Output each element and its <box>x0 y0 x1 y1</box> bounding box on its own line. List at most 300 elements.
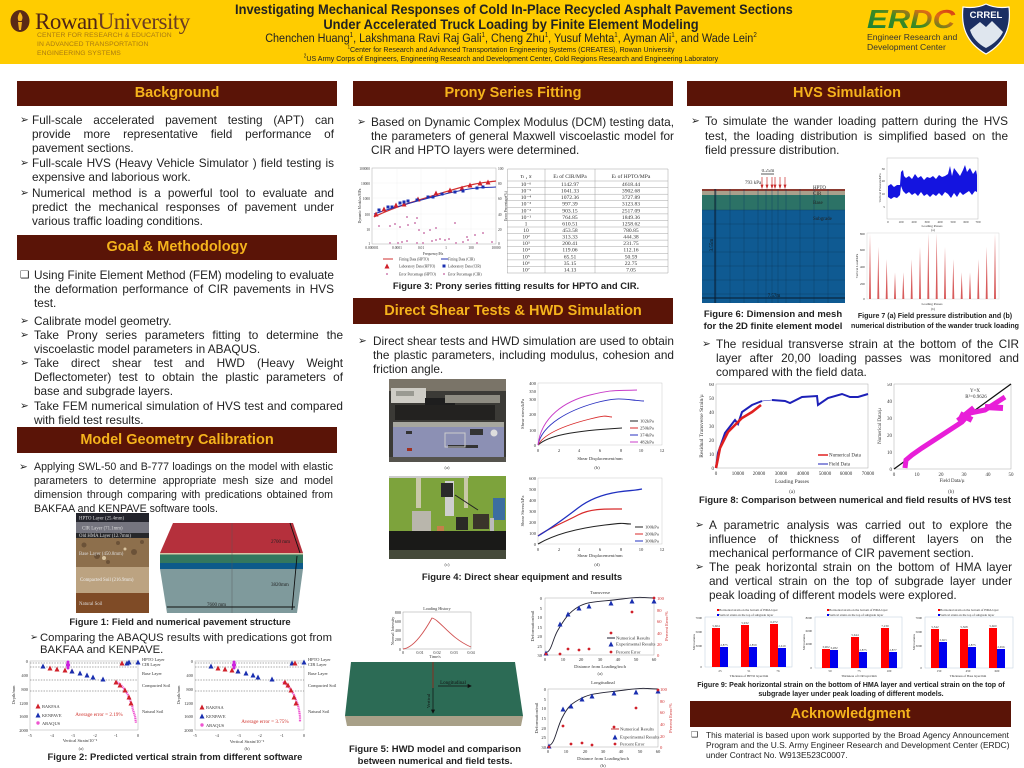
chart: transverse: Percent Error/% <box>664 611 669 641</box>
figure 3: prony parameter table: 453.58 <box>562 228 578 234</box>
bullet: loadings: parameters to determine appropriate mesh size and model <box>34 475 333 487</box>
bullet: APT: provide more representative field performance of <box>32 127 334 141</box>
bar chart: HPTO thickness: 76 <box>776 669 780 673</box>
bar chart: base thickness <box>912 608 1013 678</box>
figure 3: dynamic modulus chart: 100 <box>468 246 474 250</box>
logo: CRREL shield <box>962 3 1010 55</box>
figure 6: 2D finite element mesh: CIR <box>813 192 822 197</box>
chart b: numerical pressure: 800 <box>860 232 865 236</box>
figure 3: prony parameter table: 3727.89 <box>622 195 640 201</box>
figure 1: numerical 3D model: 2700 mm <box>271 540 290 545</box>
bar chart: CIR thickness: 6000 <box>806 629 812 633</box>
chart: transverse: 40 <box>657 631 662 636</box>
bar chart: HPTO thickness: 2,859 <box>749 643 757 648</box>
heading: direct shear tests and HWD simulation: Direct Shear Tests & HWD Simulation <box>384 303 642 319</box>
figure 6: 2D finite element mesh: 793 kPa <box>745 181 762 186</box>
affiliations: 1Center for Research and Advanced Transportation Engineering Systems (CREATES), Rowan University <box>347 44 675 54</box>
bullet: peak strain: and vertical strain on the top of subgrade layer under <box>709 574 1012 588</box>
chart b: shear stress at four pressures: 300 <box>529 397 537 402</box>
photo a: shear machine: (a) <box>444 465 450 470</box>
chart b: numerical versus field scatter <box>878 383 1014 495</box>
bullet: residual strain: layer after 20,00 loading passes was monitored and <box>716 351 1019 365</box>
chart: longitudinal: Percent Error <box>620 742 645 746</box>
chart a: residual transverse strain: Residual Transverse Strain/μ <box>699 394 705 458</box>
chart d: shear stress at three pressures: Shear Displacement/mm <box>577 553 623 558</box>
chart: transverse: (a) <box>597 671 603 676</box>
chart: longitudinal: Numerical Results <box>620 726 654 732</box>
heading: model geometry calibration <box>17 427 337 453</box>
bar chart: HPTO thickness: 51 <box>747 669 751 673</box>
figure 2b: vertical strain chart: (b) <box>244 746 250 751</box>
figure 2a: vertical strain chart: Average error = 2.19% <box>75 712 123 718</box>
chart: transverse: 10 <box>561 657 566 662</box>
figure 2b: vertical strain chart: -1 <box>280 733 284 738</box>
chart a: field pressure: 500 <box>950 220 956 224</box>
figure 2a: vertical strain chart: HPTO Layer <box>142 657 165 662</box>
bullet: FEM simulation: ➢ <box>20 400 29 412</box>
chart a: field pressure: Loading Passes <box>921 224 943 228</box>
caption: figure 5: Figure 5: HWD model and comparison <box>349 744 521 755</box>
bullet: FEM objective: ❑ <box>20 269 29 281</box>
heading: background <box>17 81 337 106</box>
chart: longitudinal: 0 <box>544 687 547 692</box>
chart: transverse: 5 <box>540 606 543 611</box>
chart a: residual transverse strain: 50 <box>709 397 714 402</box>
chart: longitudinal: 10 <box>541 706 547 711</box>
panel: HVS simulation <box>687 81 1019 698</box>
chart: transverse: Percent Error <box>616 650 641 654</box>
bullet: DCM: CIR and HPTO layers were determined. <box>371 143 579 157</box>
chart: longitudinal: (b) <box>600 763 606 768</box>
bullet: calibrate: ➢ <box>20 315 29 327</box>
figure 5: comparison charts <box>530 590 673 768</box>
chart b: numerical pressure: 600 <box>860 248 865 252</box>
bullet: FEM simulation <box>20 399 343 427</box>
chart b: numerical versus field scatter: R²=0.9626 <box>965 394 987 400</box>
caption: figure 6 <box>693 309 853 332</box>
bullet: residual strain: compared with the field data. <box>716 365 867 379</box>
bullet: HVS: Full-scale HVS (Heavy Vehicle Simulator ) field testing is <box>32 156 334 170</box>
bullet: wander loading: ➢ <box>691 115 700 127</box>
chart: transverse: 20 <box>579 657 584 662</box>
figure 2b: vertical strain chart: Vertical Strain/10⁻³ <box>230 739 265 744</box>
bar chart: CIR thickness: 0 <box>810 666 812 670</box>
chart b: numerical pressure: 0 <box>863 297 865 301</box>
caption: figure 9 <box>691 681 1011 699</box>
chart: transverse: 25 <box>537 644 543 649</box>
chart: longitudinal: 40 <box>660 722 665 727</box>
figure 1: numerical 3D model: 3820mm <box>271 583 289 588</box>
bullet: direct shear: friction angle. <box>373 362 443 376</box>
affiliations: 2US Army Corps of Engineers, Engineering Research and Development Center, Cold Regions Research and Engineering Laboratory <box>304 53 718 63</box>
bar chart: HPTO thickness <box>692 608 792 678</box>
figure 2b: vertical strain chart: -4 <box>215 733 220 738</box>
title: Investigating Mechanical Responses of Cold In-Place Recycled Asphalt Pavement Sections <box>235 1 793 17</box>
figure 2a: vertical strain chart: 2000 <box>19 728 29 733</box>
chart d: shear stress at three pressures: 500 <box>529 487 537 492</box>
chart: longitudinal: 30 <box>541 745 547 750</box>
chart d: shear stress at three pressures: Shear Stress/kPa <box>520 496 525 526</box>
panel: background <box>17 81 337 228</box>
figure 3: prony parameter table: 14.13 <box>564 267 576 273</box>
logo: ERDC: ERDC <box>867 4 956 34</box>
chart b: numerical versus field scatter: 10 <box>887 451 892 456</box>
figure 3: dynamic modulus chart: 0 <box>498 242 500 246</box>
figure 3: prony parameter table: 22.75 <box>625 261 637 267</box>
figure 1: field pavement layers photo: CIR Layer (71.1mm) <box>82 526 123 532</box>
bar chart: HPTO thickness: 5000 <box>696 630 702 634</box>
bar chart: base thickness: 0 <box>920 666 922 670</box>
figure 2b: vertical strain chart: 1200 <box>184 701 194 706</box>
figure 2b: vertical strain chart: -2 <box>258 733 262 738</box>
chart d: shear stress at three pressures: 12 <box>660 547 665 552</box>
figure 3: dynamic modulus chart: 10000 <box>361 182 370 186</box>
figure 2b: vertical strain chart: Natural Soil <box>308 709 330 714</box>
bullet: HVS: expensive and laborious work. <box>32 170 191 184</box>
figure 3: dynamic modulus chart: 100 <box>365 213 370 217</box>
chart: transverse: 80 <box>657 608 662 613</box>
heading: background: Background <box>135 85 219 101</box>
chart b: shear stress at four pressures: 250kPa <box>640 426 654 431</box>
bullet: parametric analysis: A parametric analysis was carried out to explore the <box>709 518 1012 532</box>
chart d: shear stress at three pressures: 4 <box>578 547 581 552</box>
figure 3: prony parameter table: 10⁻³ <box>521 202 531 208</box>
bullet: direct shear: ➢ <box>20 357 29 369</box>
chart b: shear stress at four pressures: 4 <box>578 448 581 453</box>
chart: transverse: 0 <box>544 657 547 662</box>
figure 3: dynamic modulus chart: 0.01 <box>418 246 424 250</box>
bullet: FEM objective: Using Finite Element Method (FEM) modeling to evaluate <box>34 268 334 282</box>
chart b: numerical versus field scatter: 20 <box>887 434 892 439</box>
authors: Chenchen Huang1, Lakshmana Ravi Raj Gali1, Cheng Zhu1, Yusuf Mehta1, Ayman Ali1, and Wade Lein2 <box>265 31 757 45</box>
figure 6: 2D finite element mesh: Subgrade <box>813 217 833 222</box>
figure 1: numerical 3D model <box>160 522 303 613</box>
chart a: residual transverse strain: 20000 <box>753 472 766 477</box>
bar chart: HPTO thickness: 0 <box>700 665 702 669</box>
chart: transverse: Distance from Loading/inch <box>574 664 627 669</box>
figure 3: prony parameter table: 10⁻⁶ <box>521 182 531 188</box>
bullet: DCM: ➢ <box>357 116 366 128</box>
figure 2a: vertical strain chart: Vertical Strain/10⁻³ <box>63 738 98 743</box>
figure 3: dynamic modulus chart: Error Percentage (HPTO) <box>399 272 437 276</box>
bar chart: base thickness: 7000 <box>916 616 922 620</box>
chart a: residual transverse strain <box>699 383 875 495</box>
bar chart: base thickness: 600 <box>995 669 1000 673</box>
figure 6: 2D finite element mesh: HPTO <box>813 186 826 191</box>
bullet: direct shear: Deflectometer) test to obtain the plastic parameters of <box>34 370 343 384</box>
bar chart: base thickness: 5,660 <box>989 624 997 629</box>
chart a: residual transverse strain: 50000 <box>819 472 832 477</box>
figure 3: prony parameter table: 10⁻⁴ <box>521 195 531 201</box>
bullet: residual strain: The residual transverse strain at the bottom of the CIR <box>716 337 1019 351</box>
chart a: residual transverse strain: 0 <box>712 467 714 472</box>
chart b: shear stress at four pressures: 6 <box>599 448 602 453</box>
chart d: shear stress at three pressures: (d) <box>594 562 600 567</box>
bar chart: HPTO thickness: 2,875 <box>720 643 728 648</box>
figure 2a: vertical strain chart: 400 <box>21 673 29 678</box>
chart b: numerical pressure: (b) <box>931 307 935 311</box>
caption: figure 8: Figure 8: Comparison between numerical and field results of HVS test <box>699 494 1011 505</box>
chart: transverse: Transverse <box>590 590 610 595</box>
figure 9: bar charts <box>690 605 1015 685</box>
figure 3: prony parameter table: 2517.09 <box>622 208 640 214</box>
chart: transverse: Experimental Results <box>616 642 656 646</box>
chart b: numerical versus field scatter: (b) <box>948 490 954 495</box>
chart a: field pressure <box>878 158 981 232</box>
chart b: numerical versus field scatter: 20 <box>938 473 944 478</box>
figure 3: prony parameter table: 231.75 <box>623 241 639 247</box>
chart a: residual transverse strain: 0 <box>715 472 718 477</box>
chart a: field pressure: Vertical Pressure/kPa <box>878 173 882 202</box>
heading: direct shear tests and HWD simulation <box>353 298 673 324</box>
figure 2b: vertical strain chart: 2000 <box>184 728 194 733</box>
bullet: peak strain: peak loading of different models were explored. <box>709 588 957 602</box>
figure 2b: vertical strain chart: 0 <box>191 659 194 664</box>
chart a: field pressure: 700 <box>975 220 981 224</box>
panel: goal and methodology <box>17 235 344 427</box>
bullet: parametric analysis: mechanical performance of CIR pavement section. <box>709 546 974 560</box>
chart: longitudinal <box>534 680 673 768</box>
bar chart: HPTO thickness: 3000 <box>696 644 702 648</box>
logo sub-caption: CENTER FOR RESEARCH & EDUCATION <box>37 32 172 39</box>
heading: HVS simulation <box>687 81 1007 106</box>
figure 2b: vertical strain chart: BAKFAA <box>206 705 225 710</box>
chart d: shear stress at three pressures: 200 <box>529 520 537 525</box>
bullet: FEM objective: test. <box>34 296 56 310</box>
chart: longitudinal: 20 <box>583 749 588 754</box>
text: acknowledgment <box>691 730 1009 760</box>
chart: longitudinal: 40 <box>619 749 624 754</box>
chart b: numerical pressure: 400 <box>860 265 865 269</box>
figure 3: dynamic modulus chart: 0.0001 <box>392 246 402 250</box>
figure 3: dynamic modulus chart: 10000 <box>492 246 501 250</box>
bar chart: CIR thickness: Horizontal strain on the bottom of HMA layer <box>829 608 889 612</box>
figure 2b: vertical strain chart: KENPAVE <box>206 714 226 719</box>
bar chart: HPTO thickness: Thickness of HPTO layer/mm <box>730 674 769 678</box>
figure 5: HWD model: 0.02 <box>433 650 441 655</box>
title <box>235 1 793 32</box>
chart d: shear stress at three pressures: 10 <box>639 547 644 552</box>
chart a: residual transverse strain: Numerical Data <box>829 454 862 458</box>
text: acknowledgment: This material is based upon work supported by the Broad Agency Announcement <box>706 730 1009 740</box>
figure 2a: vertical strain chart: Natural Soil <box>142 709 164 714</box>
figure 3: prony parameter table: 610.51 <box>562 221 578 227</box>
chart a: field pressure: 5 <box>883 205 885 209</box>
figure 3: prony parameter table: 1849.36 <box>622 215 640 221</box>
figure 3: dynamic modulus chart: 80 <box>498 182 502 186</box>
chart b: shear stress at four pressures: 102kPa <box>640 419 654 424</box>
caption: figure 6: Figure 6: Dimension and mesh <box>704 309 842 320</box>
figure 3: prony parameter table: 65.51 <box>564 254 576 260</box>
bullet: APT: pavement sections. <box>32 141 134 155</box>
figure 5: HWD model: 0.03 <box>450 650 458 655</box>
bullet: direct shear: base and subgrade layers. <box>34 384 173 398</box>
bar chart: CIR thickness: 5,644 <box>851 633 859 638</box>
chart: longitudinal: 5 <box>544 697 547 702</box>
figure 3: prony parameter table: 10⁻² <box>521 208 531 214</box>
figure 1: field pavement layers photo: Natural Soil <box>79 602 103 607</box>
figure 3: prony parameter table: 10 <box>523 228 529 234</box>
bullet: numerical method: ➢ <box>20 187 29 199</box>
chart b: shear stress at four pressures: 8 <box>620 448 623 453</box>
chart a: field pressure: 10 <box>882 192 885 196</box>
figure 2a: vertical strain chart: ABAQUS <box>42 721 61 726</box>
chart a: field pressure: 100 <box>898 220 904 224</box>
chart a: residual transverse strain: Field Data <box>829 462 851 468</box>
logo: CRREL shield: CRREL <box>970 10 1003 21</box>
caption: figure 7: Figure 7 (a) Field pressure distribution and (b) <box>858 313 1012 320</box>
bullet: numerical method <box>20 186 334 228</box>
figure 2a: vertical strain chart: 1200 <box>19 701 29 706</box>
figure 3: prony parameter table: 10⁻⁵ <box>521 189 531 195</box>
bar chart: base thickness: Horizontal strain on the bottom of HMA layer <box>940 608 1000 612</box>
chart b: shear stress at four pressures: (b) <box>594 465 600 470</box>
figure 3: prony parameter table: 4618.44 <box>622 182 640 188</box>
figure 2a: vertical strain chart: -2 <box>93 733 97 738</box>
figure 3: prony parameter table: 1142.97 <box>561 182 579 188</box>
chart d: shear stress at three pressures: 400 <box>529 498 537 503</box>
bar chart: CIR thickness: 75 <box>857 669 861 673</box>
chart: longitudinal: 0 <box>660 745 663 750</box>
chart d: shear stress at three pressures: 8 <box>620 547 623 552</box>
chart: transverse: Numerical Results <box>616 636 650 640</box>
bullet: numerical method: Numerical method is a powerful tool to evaluate and <box>32 186 334 200</box>
logo sub-caption: IN ADVANCED TRANSPORTATION <box>37 41 148 48</box>
photo c: shear apparatus: (c) <box>444 562 450 567</box>
figure 3: prony parameter table: 313.33 <box>562 235 578 241</box>
figure 2a: vertical strain chart: (a) <box>79 746 84 751</box>
logo sub-caption <box>37 32 172 57</box>
chart: longitudinal: Deformation/mil <box>534 702 539 733</box>
chart a: residual transverse strain: (a) <box>789 490 795 495</box>
chart b: numerical versus field scatter: 50 <box>1008 473 1014 478</box>
chart b: numerical versus field scatter: 50 <box>887 383 892 388</box>
bullet: DCM: the parameters of general Maxwell viscoelastic model for <box>371 129 674 143</box>
figure 3: dynamic modulus chart: 100 <box>498 167 504 171</box>
figure 6: 2D finite element mesh: 0.25m <box>762 169 774 174</box>
heading: prony series fitting: Prony Series Fitting <box>444 85 581 101</box>
bullet: comparing: BAKFAA and KENPAVE. <box>40 644 163 656</box>
figure 1: field pavement layers photo: Base Layer (450.8mm) <box>79 552 124 557</box>
panel: prony series fitting: Error Percentage(%) <box>504 190 508 221</box>
bar chart: CIR thickness: Thickness of CIR layer/mm <box>841 674 877 678</box>
figure 7: field and numerical wander distribution <box>860 155 1005 310</box>
chart d: shear stress at three pressures: 600 <box>529 476 537 481</box>
chart b: numerical pressure: Vertical Load/kPa <box>855 253 859 278</box>
bar chart: base thickness: 450 <box>966 669 971 673</box>
chart a: field pressure: 20 <box>882 179 885 183</box>
bullet: loadings: BAKFAA and KENPAVE software tools. <box>34 503 218 515</box>
figure 3: dynamic modulus chart: 40 <box>498 213 502 217</box>
chart b: shear stress at four pressures <box>520 381 665 470</box>
chart: longitudinal: 50 <box>638 749 643 754</box>
bar chart: CIR thickness: Vertical strain on the top of subgrade layer <box>829 613 884 617</box>
bar chart: base thickness: 5000 <box>916 630 922 634</box>
chart: longitudinal: 25 <box>541 735 547 740</box>
figure 1: field pavement layers photo: HPTO Layer (25.4mm) <box>79 516 124 522</box>
chart: transverse: 50 <box>634 657 639 662</box>
bullet: wander loading: To simulate the wander loading pattern during the HVS <box>705 114 1008 128</box>
chart: longitudinal: 60 <box>660 710 665 715</box>
bar chart: CIR thickness: 3,902 <box>822 645 830 650</box>
chart a: field pressure: 200 <box>911 220 917 224</box>
bar chart: HPTO thickness: 25 <box>718 669 722 673</box>
figure 2b: vertical strain chart: Compacted Soil <box>308 683 337 688</box>
figure 3: prony parameter table: 112.16 <box>623 248 639 254</box>
bullet: loadings: Applying SWL-50 and B-777 loadings on the model with elastic <box>34 461 333 473</box>
bullet: direct shear <box>358 334 674 376</box>
chart a: field pressure: 30 <box>882 167 885 171</box>
figure 2b: vertical strain chart: Depth/mm <box>176 685 181 704</box>
chart b: shear stress at four pressures: Shear stress/kPa <box>520 399 525 429</box>
figure 1: numerical 3D model: 7600 mm <box>207 603 226 608</box>
chart b: numerical versus field scatter: 40 <box>887 400 892 405</box>
figure 3: prony parameter table: 10⁵ <box>522 254 530 260</box>
chart: transverse: 15 <box>537 625 543 630</box>
bar chart: CIR thickness: 8000 <box>806 616 812 620</box>
chart a: field pressure: (a) <box>931 228 935 232</box>
bullet: direct shear <box>20 356 344 398</box>
figure 2a: vertical strain chart: Depth/mm <box>11 685 16 704</box>
header banner <box>0 0 1024 64</box>
bullet: parametric analysis <box>695 518 1012 561</box>
figure 2a: vertical strain chart: 800 <box>21 687 29 692</box>
figure 5: HWD model: 0 <box>402 650 404 655</box>
chart b: shear stress at four pressures: 100 <box>529 428 537 433</box>
chart: longitudinal: 80 <box>660 699 665 704</box>
figure 3: prony parameter table: 200.41 <box>562 241 578 247</box>
figure 3: dynamic modulus chart <box>358 167 508 276</box>
figure 5: HWD model: Normal Intensity <box>390 616 395 645</box>
figure 2b: vertical strain chart: ABAQUS <box>206 723 225 728</box>
figure 3: prony parameter table: 3123.83 <box>622 202 640 208</box>
bar chart: HPTO thickness: Microstrains <box>692 633 696 650</box>
chart: longitudinal: Longitudinal <box>591 680 616 685</box>
bar chart: CIR thickness: 4000 <box>806 642 812 646</box>
heading: goal and methodology: Goal & Methodology <box>107 239 247 255</box>
figure 3: dynamic modulus chart: 1 <box>368 242 370 246</box>
chart b: shear stress at four pressures: 0 <box>534 443 537 448</box>
chart a: residual transverse strain: 10000 <box>732 472 745 477</box>
chart: transverse: 60 <box>652 657 657 662</box>
bullet: direct shear: Direct shear tests and HWD simulation are used to obtain <box>373 334 674 348</box>
bullet: Prony <box>20 328 343 356</box>
chart: longitudinal: 100 <box>660 687 668 692</box>
figure 3: prony parameter table: 903.15 <box>562 208 578 214</box>
text: acknowledgment: under Contract No. W913E523C0007. <box>706 750 848 760</box>
figure 5: HWD model: Longitudinal <box>440 681 467 686</box>
figure 5: HWD model: 800 <box>395 610 401 615</box>
logo sub-caption: ENGINEERING SYSTEMS <box>37 50 121 57</box>
bar chart: base thickness: Microstrains <box>912 633 916 650</box>
bar chart: CIR thickness: 100 <box>887 669 892 673</box>
chart d: shear stress at three pressures: 100 <box>529 531 537 536</box>
figure 3: dynamic modulus chart: Error Percentage (CIR) <box>448 272 482 276</box>
bullet: peak strain: The peak horizontal strain on the bottom of HMA layer <box>709 560 1012 574</box>
bar chart: base thickness: 5,568 <box>960 625 968 630</box>
figure 5: HWD model <box>345 606 523 726</box>
figure 3: dynamic modulus chart: Laboratory Data (CIR) <box>448 264 482 268</box>
figure 2a: vertical strain chart: -3 <box>71 733 76 738</box>
chart d: shear stress at three pressures: 100kPa <box>645 525 659 530</box>
bar chart: HPTO thickness: 6,072 <box>770 620 778 625</box>
figure 3: dynamic modulus chart: 60 <box>498 197 502 201</box>
bullet: comparing <box>30 632 332 656</box>
bullet: peak strain <box>695 560 1012 603</box>
figure 8: numerical vs field comparison <box>695 380 1015 495</box>
figure 3: prony parameter table: 1258.62 <box>622 221 640 227</box>
figure 3: dynamic modulus chart: 1000 <box>363 197 370 201</box>
